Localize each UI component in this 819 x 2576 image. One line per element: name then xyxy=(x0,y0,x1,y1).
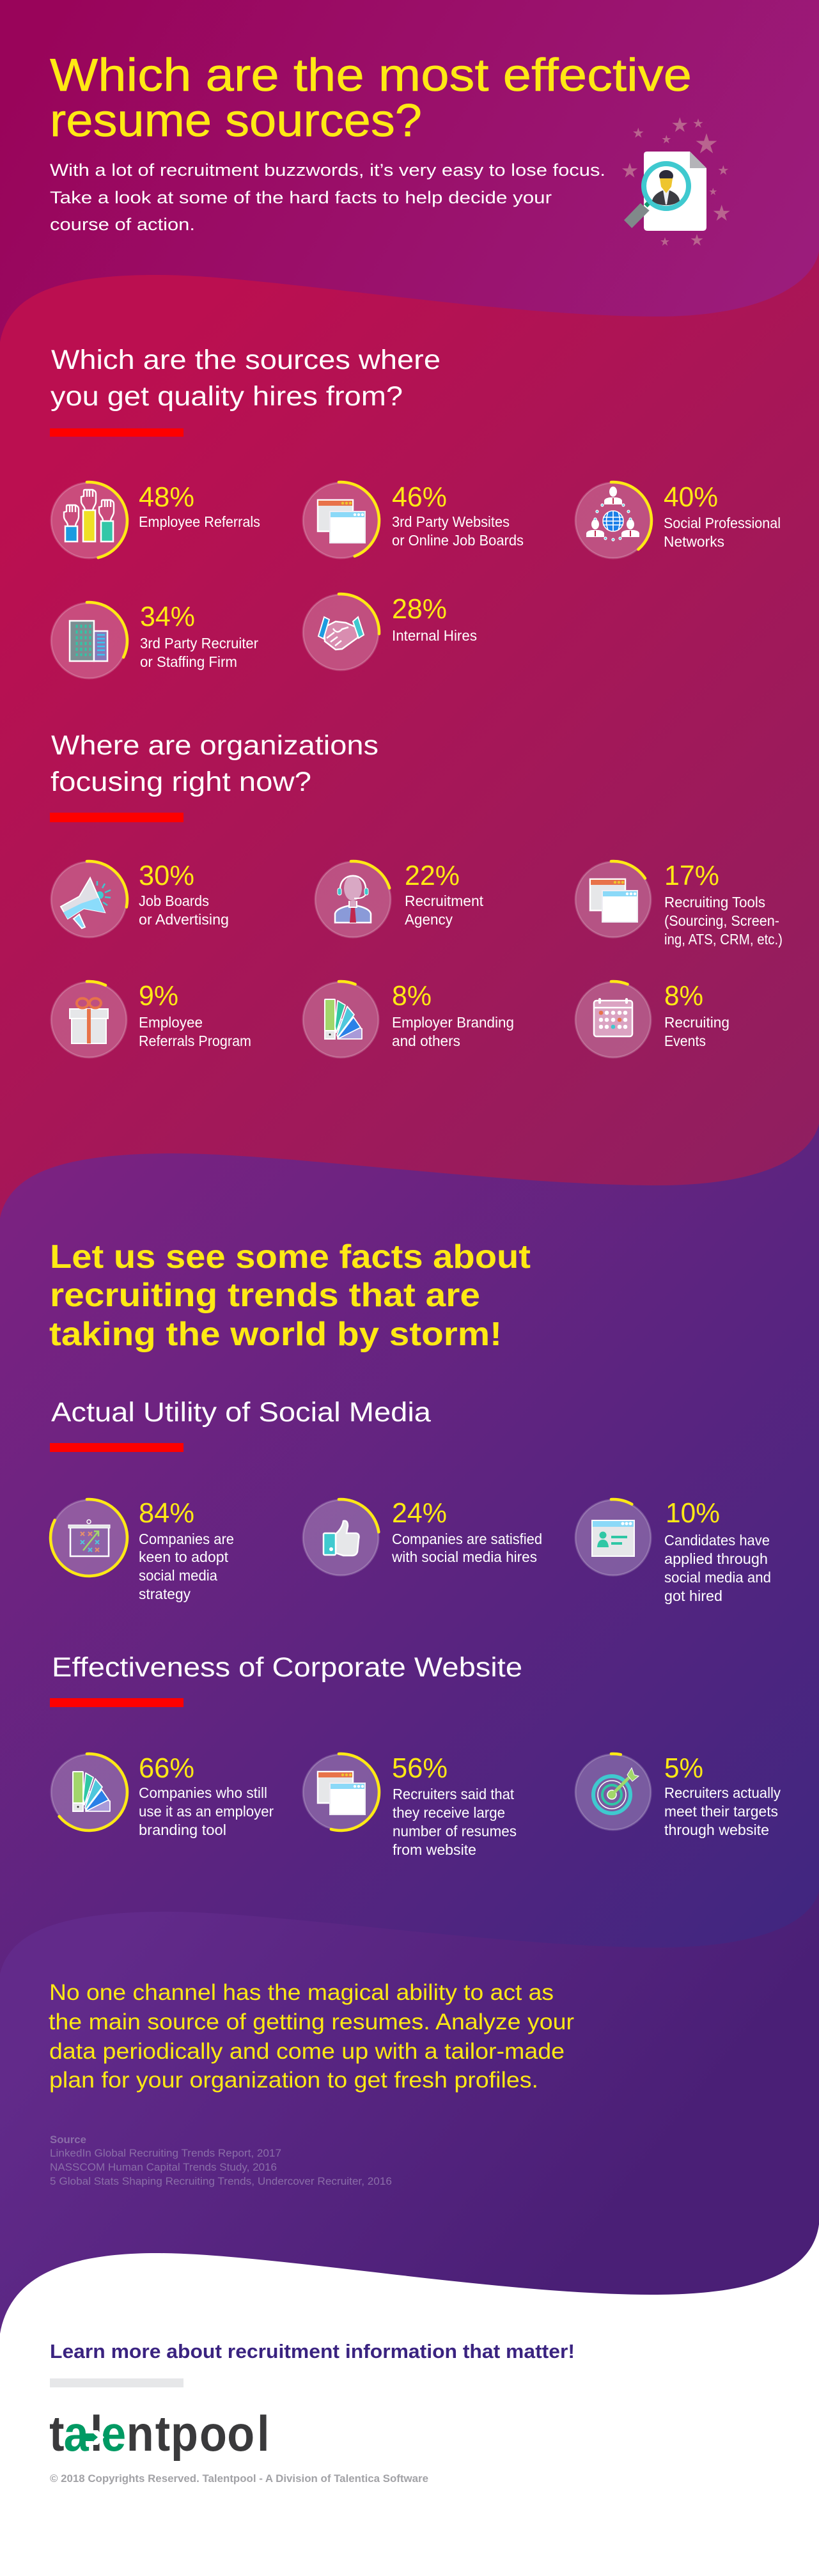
stat: 48% employee referrals xyxy=(49,480,260,561)
icon: strategy board xyxy=(68,1520,110,1556)
stat: 40% social networks xyxy=(573,480,781,561)
logo: talentpool: n xyxy=(127,2406,154,2462)
label: Companies are satisfied xyxy=(392,1531,542,1547)
copyright: © 2018 Copyrights Reserved. Talentpool - A Division of Talentica Software xyxy=(50,2472,428,2485)
icon: raised hands xyxy=(64,490,114,542)
label: keen to adopt xyxy=(139,1549,229,1565)
label: Recruiters actually xyxy=(664,1784,781,1801)
label xyxy=(139,1531,234,1602)
stat: 8% employer branding xyxy=(300,980,514,1060)
label: applied through xyxy=(664,1550,768,1567)
label xyxy=(139,1784,274,1838)
icon: megaphone xyxy=(61,878,111,928)
ring 56% xyxy=(300,1752,381,1832)
label: or Staffing Firm xyxy=(140,653,237,670)
heading: quality hires: you get quality hires from? xyxy=(51,381,403,412)
background wave: crimson section xyxy=(0,251,819,1279)
ring 84% xyxy=(49,1497,129,1578)
conclusion text: the main source of getting resumes. Analyze your xyxy=(49,2010,574,2034)
heading: social media: Actual Utility of Social Media xyxy=(51,1397,431,1428)
icon: thumbs up xyxy=(324,1521,359,1556)
title: resume sources? xyxy=(50,95,422,146)
value: 30% xyxy=(139,860,194,891)
label: Employer Branding xyxy=(392,1014,514,1031)
heading: organization focus: Where are organizations xyxy=(51,730,378,761)
icon: call-centre agent xyxy=(335,875,371,923)
label: Social Professional xyxy=(664,515,781,531)
label: Recruiters said that xyxy=(393,1786,515,1802)
logo: talentpool: o xyxy=(199,2406,227,2462)
heading: quality hires xyxy=(51,345,441,412)
value: 28% xyxy=(392,593,447,625)
label: strategy xyxy=(139,1586,191,1602)
label: ing, ATS, CRM, etc.) xyxy=(664,931,783,948)
label: got hired xyxy=(664,1588,722,1604)
ring 9% xyxy=(49,980,129,1060)
label: meet their targets xyxy=(664,1803,778,1820)
label: or Online Job Boards xyxy=(392,532,524,549)
icon: target with arrow xyxy=(593,1768,639,1813)
grey divider xyxy=(50,2378,183,2387)
label: number of resumes xyxy=(393,1823,517,1839)
conclusion text: data periodically and come up with a tailor-made xyxy=(49,2039,565,2064)
ring 34% xyxy=(49,600,129,681)
label xyxy=(391,1531,542,1565)
value: 10% xyxy=(666,1497,720,1529)
intro text xyxy=(50,160,605,234)
background: header purple xyxy=(0,0,819,448)
stat: 56% resumes from website xyxy=(300,1752,517,1858)
icon: globe with people xyxy=(586,487,639,541)
label: Employee xyxy=(139,1014,203,1031)
stat: 28% internal hires xyxy=(300,592,477,673)
conclusion text xyxy=(49,1980,574,2093)
heading: recruiting trends: recruiting trends that are xyxy=(50,1277,480,1314)
value: 34% xyxy=(140,601,195,632)
logo: talentpool: t xyxy=(155,2406,170,2462)
red underline xyxy=(50,813,183,822)
heading: organization focus: focusing right now? xyxy=(51,767,311,797)
ring 5% xyxy=(573,1752,653,1832)
stat: 17% recruiting tools xyxy=(573,859,783,948)
label: through website xyxy=(664,1822,769,1838)
ring 17% xyxy=(573,859,653,940)
label: Internal Hires xyxy=(392,627,477,644)
stat: 24% satisfied xyxy=(300,1497,542,1578)
value: 48% xyxy=(139,481,194,513)
title: Which are the most effective xyxy=(50,50,692,101)
label: Job Boards xyxy=(139,893,209,909)
logo: talentpool: l xyxy=(90,2406,103,2462)
label: social media and xyxy=(664,1569,771,1586)
value: 66% xyxy=(139,1752,194,1784)
icon: handshake xyxy=(318,617,364,650)
label xyxy=(392,1014,514,1049)
value: 8% xyxy=(392,980,432,1011)
label: 3rd Party Websites xyxy=(392,513,510,530)
ring 8% xyxy=(573,980,653,1060)
value: 5% xyxy=(664,1752,703,1784)
ring 46% xyxy=(300,480,381,561)
ring 66% xyxy=(49,1752,129,1832)
heading: recruiting trends: Let us see some facts about xyxy=(50,1238,531,1276)
conclusion text: plan for your organization to get fresh profiles. xyxy=(49,2068,538,2093)
sources xyxy=(50,2134,392,2187)
icon: browser windows xyxy=(318,500,365,543)
sources: Source xyxy=(50,2134,86,2146)
label xyxy=(664,894,783,948)
ring 10% xyxy=(573,1497,653,1578)
background wave: white footer xyxy=(0,2224,819,2576)
sources: LinkedIn Global Recruiting Trends Report, 2017 xyxy=(50,2147,281,2159)
icon: colour swatch fan xyxy=(325,999,362,1039)
label: from website xyxy=(393,1841,476,1858)
label: social media xyxy=(139,1567,217,1584)
heading: corporate website: Effectiveness of Corporate Website xyxy=(52,1652,522,1683)
label: Companies are xyxy=(139,1531,234,1547)
value: 46% xyxy=(392,481,447,513)
label: or Advertising xyxy=(139,911,229,928)
icon: resume under magnifying glass with stars xyxy=(622,117,730,246)
heading: organization focus xyxy=(51,730,378,797)
intro text: Take a look at some of the hard facts to help decide your xyxy=(50,188,552,207)
label xyxy=(139,1014,251,1049)
label: Networks xyxy=(664,533,724,550)
label: 3rd Party Recruiter xyxy=(140,635,258,652)
heading: quality hires: Which are the sources where xyxy=(51,345,441,375)
stat: 10% candidates hired xyxy=(573,1497,771,1604)
label: Recruitment xyxy=(405,893,484,909)
red underline xyxy=(50,428,183,437)
label: Referrals Program xyxy=(139,1033,251,1049)
value: 84% xyxy=(139,1497,194,1529)
stat: 84% social media strategy xyxy=(49,1497,234,1602)
stat: 66% employer branding tool xyxy=(49,1752,274,1838)
sources: 5 Global Stats Shaping Recruiting Trends, Undercover Recruiter, 2016 xyxy=(50,2175,392,2187)
label xyxy=(664,1532,771,1604)
label: with social media hires xyxy=(391,1549,537,1565)
logo: talentpool: p xyxy=(171,2406,198,2462)
stat: 9% referrals program xyxy=(49,980,251,1060)
stat: 5% meet targets xyxy=(573,1752,781,1838)
label xyxy=(393,1786,517,1858)
heading: recruiting trends xyxy=(49,1238,531,1353)
background wave: violet section xyxy=(0,1124,819,2046)
label xyxy=(664,1014,729,1049)
label xyxy=(664,515,781,550)
sources: NASSCOM Human Capital Trends Study, 2016 xyxy=(50,2161,277,2173)
label: Recruiting Tools xyxy=(664,894,765,910)
intro text: With a lot of recruitment buzzwords, it’s very easy to lose focus. xyxy=(50,160,605,180)
label xyxy=(139,893,229,928)
value: 9% xyxy=(139,980,178,1011)
logo: talentpool: t xyxy=(49,2406,64,2462)
ring 8% xyxy=(300,980,381,1060)
stat: 8% recruiting events xyxy=(573,980,729,1060)
ring 24% xyxy=(300,1497,381,1578)
label: Companies who still xyxy=(139,1784,267,1801)
label: Events xyxy=(664,1033,706,1049)
label: use it as an employer xyxy=(139,1803,274,1820)
label xyxy=(140,635,258,670)
icon: calendar xyxy=(594,998,632,1036)
logo: talentpool xyxy=(49,2406,270,2462)
icon: colour swatch fan xyxy=(73,1772,110,1811)
ring 48% xyxy=(49,480,129,561)
label: and others xyxy=(392,1033,460,1049)
ring 22% xyxy=(313,859,393,940)
label: Employee Referrals xyxy=(139,513,260,530)
logo: talentpool: o xyxy=(227,2406,254,2462)
label: Recruiting xyxy=(664,1014,729,1031)
stat: 30% job boards or advertising xyxy=(49,859,229,940)
stat: 34% staffing firm xyxy=(49,600,258,681)
value: 8% xyxy=(664,980,703,1011)
value: 56% xyxy=(392,1752,448,1784)
title xyxy=(50,50,692,146)
background wave: closing purple section xyxy=(0,1891,819,2366)
icon: browser windows xyxy=(590,879,637,922)
label: they receive large xyxy=(393,1804,505,1821)
intro text: course of action. xyxy=(50,215,195,234)
red underline xyxy=(50,1698,183,1707)
label: (Sourcing, Screen- xyxy=(664,912,779,929)
icon: browser windows xyxy=(318,1772,365,1815)
stat: 22% recruitment agency xyxy=(313,859,484,940)
ring 28% xyxy=(300,592,381,673)
label: Candidates have xyxy=(664,1532,770,1549)
label: Agency xyxy=(405,911,453,928)
conclusion text: No one channel has the magical ability to act as xyxy=(49,1980,554,2005)
label xyxy=(392,513,524,549)
value: 22% xyxy=(405,860,460,891)
label xyxy=(405,893,484,928)
heading: recruiting trends: taking the world by storm! xyxy=(49,1316,502,1353)
ring 30% xyxy=(49,859,129,940)
value: 24% xyxy=(392,1497,447,1529)
call to action: Learn more about recruitment information that matter! xyxy=(50,2340,575,2362)
icon: gift box xyxy=(70,999,108,1043)
logo: talentpool: e xyxy=(101,2406,126,2462)
label xyxy=(664,1784,781,1838)
ring 40% xyxy=(573,480,653,561)
value: 17% xyxy=(664,860,719,891)
label: branding tool xyxy=(139,1822,226,1838)
icon: profile window xyxy=(592,1520,634,1556)
icon: office buildings xyxy=(70,621,107,661)
logo: talentpool: a xyxy=(64,2406,89,2462)
value: 40% xyxy=(664,481,718,513)
logo: talentpool: l xyxy=(257,2406,270,2462)
stat: 46% job boards xyxy=(300,480,524,561)
red underline xyxy=(50,1443,183,1452)
